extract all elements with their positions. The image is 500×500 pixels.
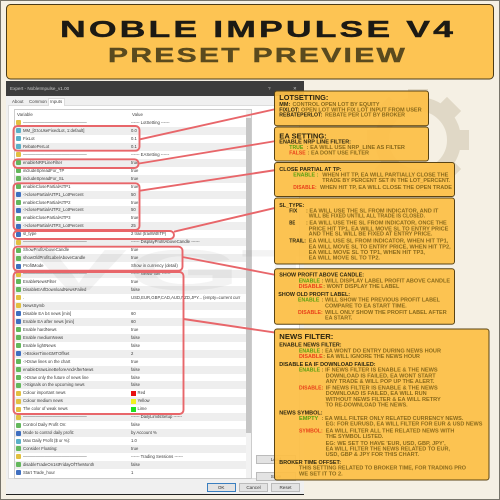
callout: lot setting: FIXLOT: (279, 107, 300, 113)
callout: news filter: EA WILL FILTER ALL THE RELATED NEWS WITH (326, 428, 455, 434)
callout: news filter: ANY TRADE & WILL POP UP THE ALERT. (326, 379, 435, 385)
callout: EA setting: : EA DONT USE FILTER (308, 150, 369, 156)
arrow: EA setting connector (139, 141, 276, 164)
callout: news filter: EG: FOR EURUSD, EA WILL FILTER FOR EUR & USD NEWS (326, 422, 483, 428)
button: Reset: Reset (279, 485, 292, 490)
inputs table: ——————————————— (23, 120, 87, 125)
inputs table: true (131, 160, 138, 165)
inputs table: 50 (131, 192, 136, 197)
inputs table: ShowProfitAboveCandle (23, 247, 69, 252)
inputs table: Max Daily Profit ($ or %): (23, 438, 70, 443)
side button: Save: Save (271, 474, 281, 479)
inputs table: Disable EA b4 news [min] (23, 311, 71, 316)
callout: show profit: SHOW PROFIT ABOVE CANDLE: (279, 273, 364, 279)
callout: news filter: WE SET IT TO 2. (299, 471, 343, 477)
callout: SL type: : EA WILL USE THE SL FROM INDICATOR, ONCE THE (306, 221, 447, 227)
callout: close partial at TP: ENABLE : (293, 172, 319, 178)
inputs table: ------ Trading Sessions ------ (131, 454, 183, 459)
callout: news filter: : EA WILL FILTER ONLY RELATED CURRENCY NEWS. (322, 416, 464, 422)
inputs table: Yellow (138, 398, 150, 403)
arrow: lot settings connector (140, 109, 276, 139)
callout: news filter: EA WILL FILTER THE NEWS RELATED TO EUR, (326, 447, 451, 453)
inputs table: The color of weak news (23, 406, 68, 411)
inputs table: false (131, 462, 140, 467)
callout: close partial at TP: DISABLE: (293, 185, 317, 191)
callout: show profit: : WONT DISPLAY THE LABEL (323, 284, 400, 290)
arrow: close partial connector (140, 170, 276, 191)
inputs table: ->Signals on the upcoming news (23, 382, 85, 387)
inputs table: ProfitMode (23, 263, 44, 268)
button: Cancel (239, 483, 268, 492)
callout: news filter: DISABLE (299, 354, 323, 360)
callout: lot setting (274, 91, 428, 126)
inputs table: disableTradeOn1stFridayOfTheMonth (23, 462, 94, 467)
heading: NOBLE IMPULSE V4 (60, 17, 456, 42)
highlight: close partial (14, 183, 140, 230)
arrow: sl type connector (174, 208, 276, 232)
inputs table: includeSpreadFor_SL (23, 176, 64, 181)
callout: lot setting: OPEN LOT WITH FIX LOT INPUT FROM USER (301, 107, 422, 113)
inputs table: true (131, 168, 138, 173)
callout: EA setting: TRUE (289, 145, 304, 151)
inputs table: FixLot (23, 136, 35, 141)
window title bar (6, 81, 304, 96)
inputs table: 60 (131, 311, 136, 316)
inputs table: true (131, 446, 138, 451)
callout: SL type: BE (289, 221, 296, 227)
callout: SL type: PRICE HIT TP1, EA WILL MOVE SL TO ENTRY PRICE (309, 226, 449, 232)
title banner (6, 4, 494, 79)
inputs table: ->closePartialAtTP2_LotPercent (23, 207, 84, 212)
button: Cancel: Cancel (246, 485, 261, 490)
callout: EA setting (274, 127, 428, 161)
inputs table: enableClosePartialAtTP1 (23, 184, 70, 189)
inputs table: false (131, 343, 140, 348)
inputs table: Enable lightNews (23, 343, 56, 348)
callout: SL type (274, 198, 454, 264)
inputs table: 25 (131, 223, 136, 228)
callout: show profit: COMPARE TO EA START TIME. (325, 303, 407, 309)
callout: news filter: : EA WONT DO ENTRY DURING NEWS HOUR (322, 348, 441, 354)
inputs table: ——————————————— (23, 152, 87, 157)
highlight: NRP filter (14, 159, 138, 168)
settings pane (8, 105, 300, 479)
callout: show profit: DISABLE: (298, 310, 323, 316)
inputs table: false (131, 287, 140, 292)
inputs table: sl_type (23, 231, 36, 236)
inputs table: Start Trade_hour (23, 470, 55, 475)
button: OK: OK (218, 485, 224, 490)
inputs table: ------ LotSetting ------ (131, 120, 170, 125)
side button: Load: Load (271, 457, 281, 462)
inputs table: 60 (131, 319, 136, 324)
inputs table: 1 (131, 470, 133, 475)
inputs table: NewsSymb (23, 303, 44, 308)
inputs table: 50 (131, 207, 136, 212)
callout: lot setting: CONTROL OPEN LOT BY EQUITY (292, 102, 380, 108)
callout: lot setting: REBATEPERLOT: (279, 113, 323, 119)
inputs table: ->closePartialAtTP3_LotPercent (23, 223, 84, 228)
inputs table: false (131, 335, 140, 340)
inputs table: EnableNewsFilter (23, 279, 56, 284)
callout: show profit (274, 269, 454, 324)
callout: news filter: SYMBOL: (299, 428, 323, 434)
button: OK (207, 483, 236, 492)
callout: news filter: : EA WILL IGNORE THE NEWS HOUR (323, 354, 420, 360)
callout: EA setting: : EA WILL USE NRP_LINE AS FILTER (307, 145, 405, 151)
callout: news filter: NEWS FILTER: (279, 332, 333, 341)
callout: SL type: WILL BE FIXED UNTILL ALL TRADE IS CLOSED. (309, 214, 426, 220)
callout: news filter: ENABLE (299, 368, 321, 374)
inputs table (14, 109, 252, 479)
window title bar: ✕ (293, 86, 297, 91)
inputs table: Lime (138, 406, 147, 411)
inputs table: ——————————————— (23, 239, 87, 244)
inputs table: ->Draw only the future of news line (23, 374, 89, 380)
inputs table: Enable mediumNews (23, 335, 63, 340)
highlight: news filter (14, 272, 184, 414)
inputs table: showOldProfitLabelAboveCandle (23, 255, 85, 260)
button: Reset (271, 483, 300, 492)
callout: SL type: EA WILL USE SL FROM INDICATOR, WHEN HIT TP1, (309, 239, 449, 245)
inputs table: includeSpreadFor_TP (23, 168, 64, 173)
callout: news filter: THIS SETTING RELATED TO BROKER TIME, FOR TRADING PRO (299, 466, 466, 472)
inputs table: Enable EA after news [min] (23, 319, 74, 324)
inputs table: true (131, 247, 138, 252)
inputs table: enableClosePartialAtTP2 (23, 200, 70, 205)
callout: SL type: TRAIL: (289, 239, 306, 245)
callout: show profit: DISABLE (299, 284, 323, 290)
scrollbar (246, 110, 252, 478)
inputs table: Colour important news (23, 390, 66, 395)
callout: news filter: WITHOUT NEWS FILTER & EA WILL RETRY (326, 397, 441, 403)
callout: news filter: USD, GBP & JPY FOR THIS CHART. (326, 452, 420, 458)
panel: expert settings window (6, 81, 304, 495)
callout: show profit: : WILL DISPLAY LABEL PROFIT ABOVE CANDLE (322, 278, 451, 284)
inputs table: enableClosePartialAtTP3 (23, 215, 70, 220)
inputs table: Consider Floating: (23, 446, 58, 451)
inputs table: ------ EASetting ------ (131, 152, 169, 157)
callout: news filter: THE SYMBOL LISTED. (326, 434, 384, 440)
callout: lot setting: MM: (279, 102, 291, 108)
callout: news filter: : IF NEWS FILTER IS ENABLE & THE NEWS (322, 368, 438, 374)
callout: SL type: SL_TYPE: (279, 203, 305, 209)
inputs table: enableNRPLineFilter (23, 160, 62, 165)
inputs table: ------ DailyLimitsSetup ------ (131, 414, 182, 419)
callout: SL type: EA WILL MOVE SL TO TP1, WHEN HIT TP3, (309, 250, 426, 256)
inputs table: false (131, 422, 140, 427)
inputs table: true (131, 279, 138, 284)
callout: show profit: ENABLE (299, 278, 321, 284)
callout: news filter: NEWS SYMBOL: (279, 411, 323, 417)
callout: show profit: WILL ONLY SHOW THE PROFIT LABEL AFTER (325, 310, 447, 316)
inputs table: DisableEAIfDownloadNewsFailed (23, 287, 86, 292)
side button: Load (256, 455, 296, 464)
subheading: PRESET PREVIEW (108, 45, 407, 67)
inputs table: Red (138, 390, 145, 395)
inputs table: 0.1 (131, 136, 137, 141)
watermark: VGT (30, 238, 330, 303)
inputs table: ------ DisplayProfitAboveCandle ------ (131, 239, 200, 244)
window title bar: ? (268, 86, 271, 91)
inputs table: false (131, 367, 140, 372)
arrow: news connector (184, 319, 276, 333)
callout: lot setting: LOTSETTING: (279, 93, 328, 102)
inputs table: Enable hardNews (23, 327, 57, 332)
callout: show profit: : WILL SHOW THE PREVIOUS PROFIT LABEL (322, 298, 441, 304)
tab: Common: Common (29, 99, 47, 104)
inputs table: enableDrawLineBeforeAndAfterNews (23, 367, 93, 372)
highlight: lot settings (14, 126, 140, 151)
inputs table: Value (132, 112, 143, 117)
callout: news filter: DISABLE: (299, 386, 324, 392)
inputs table: true (131, 200, 138, 205)
callout: show profit: ENABLE (298, 298, 320, 304)
callout: EA setting: FALSE (289, 150, 306, 156)
inputs table: ——————————————— (23, 454, 87, 459)
inputs table: MM_[0:toUseFixedLot, 1:default] (23, 128, 84, 133)
inputs table: Colour medium news (23, 398, 63, 403)
inputs table: ->Draw lines on the chart (23, 359, 70, 364)
inputs table: 1.0 (131, 438, 137, 443)
callout: close partial at TP: WHEN HIT TP, EA WILL CLOSE THE OPEN TRADE (320, 185, 453, 191)
callout: news filter: ENABLE NEWS FILTER: (279, 342, 342, 348)
tab: Inputs (48, 98, 65, 106)
callout: SL type: AND THE SL WILL BE FIXED AT ENTRY PRICE. (309, 232, 433, 238)
callout: news filter: DISABLE EA IF DOWNLOAD FAILED: (279, 362, 376, 368)
callout: news filter: DOWNLOAD IS FAILED, EA WONT START (326, 373, 437, 379)
callout: show profit: SHOW OLD PROFIT LABEL: (278, 292, 350, 298)
callout: close partial at TP: TRADE BY PERCENT SET IN THE LOT_PERCENT. (322, 178, 451, 184)
inputs table: ------ NewsFilter ------ (131, 271, 170, 276)
inputs table: . (23, 295, 24, 300)
tab: Inputs: Inputs (50, 99, 62, 104)
inputs table: ->BrokerTimeGMTOffset (23, 351, 69, 356)
callout: EA setting: ENABLE NRP LINE FILTER: (279, 140, 351, 146)
arrow: profit connector (182, 257, 276, 275)
inputs table: 2 (131, 351, 133, 356)
inputs table: ->closePartialAtTP1_LotPercent (23, 192, 84, 197)
callout: news filter: TO RE-DOWNLOAD THE NEWS. (326, 402, 408, 408)
callout: EA setting: EA SETTING: (279, 131, 327, 140)
inputs table: RebatePerLot (23, 144, 49, 149)
inputs table: 0.1 (131, 144, 137, 149)
callout: close partial at TP: CLOSE PARTIAL AT TP: (279, 167, 342, 173)
callout: SL type: FIX (289, 208, 298, 214)
inputs table: true (131, 176, 138, 181)
inputs table: 0.0 (131, 128, 137, 133)
inputs table: true (131, 359, 138, 364)
callout: close partial at TP (274, 162, 454, 196)
inputs table: true (131, 327, 138, 332)
callout: news filter (274, 329, 489, 480)
side button: Save (256, 472, 296, 481)
callout: news filter: IF NEWS FILTER IS ENABLE & THE NEWS (326, 386, 438, 392)
inputs table: ——————————————— (23, 414, 87, 419)
inputs table: Show in currency (detail) (131, 263, 178, 268)
inputs table: true (131, 215, 138, 220)
callout: close partial at TP: WHEN HIT TP, EA WILL PARTIALLY CLOSE THE (322, 172, 449, 178)
callout: news filter: EMPTY (299, 416, 319, 422)
tab: About: About (12, 99, 23, 104)
inputs table: ——————————————— (23, 271, 87, 276)
inputs table: false (131, 382, 140, 387)
inputs table: Variable (17, 112, 33, 117)
highlight: profit display (14, 247, 182, 271)
inputs table: USD,EUR,GBP,CAD,AUD,NZD,JPY... (empty=current curr (131, 295, 240, 300)
inputs table: by Account % (131, 430, 157, 435)
window title bar: Expert - NobleImpulse_v1.00 (10, 86, 69, 91)
inputs table: true (131, 255, 138, 260)
inputs table: Mode to control daily profit: (23, 430, 74, 435)
inputs table: 2 trail (trailWithTP) (131, 231, 166, 236)
callout: SL type: EA WILL MOVE SL TO ENTRY PRICE, WHEN HIT TP2, (309, 244, 451, 250)
callout: SL type: EA WILL MOVE SL TO TP2. (309, 255, 381, 261)
callout: news filter: BROKER TIME OFFSET: (279, 460, 341, 466)
callout: show profit: EA START. (325, 315, 353, 321)
inputs table: true (131, 184, 138, 189)
callout: SL type: : EA WILL USE THE SL FROM INDICATOR, AND IT (306, 208, 439, 214)
callout: news filter: EG: WE SET TO HAVE 'EUR, USD, GBP, JPY', (326, 441, 446, 447)
inputs table: Control Daily Profit On: (23, 422, 66, 427)
callout: news filter: DOWNLOAD IS FAILED, EA WILL RUN (326, 391, 427, 397)
callout: news filter: ENABLE (299, 348, 321, 354)
callout: lot setting: REBATE PER LOT BY BROKER (325, 113, 405, 119)
highlight: sl type (14, 231, 174, 239)
inputs table: false (131, 374, 140, 380)
